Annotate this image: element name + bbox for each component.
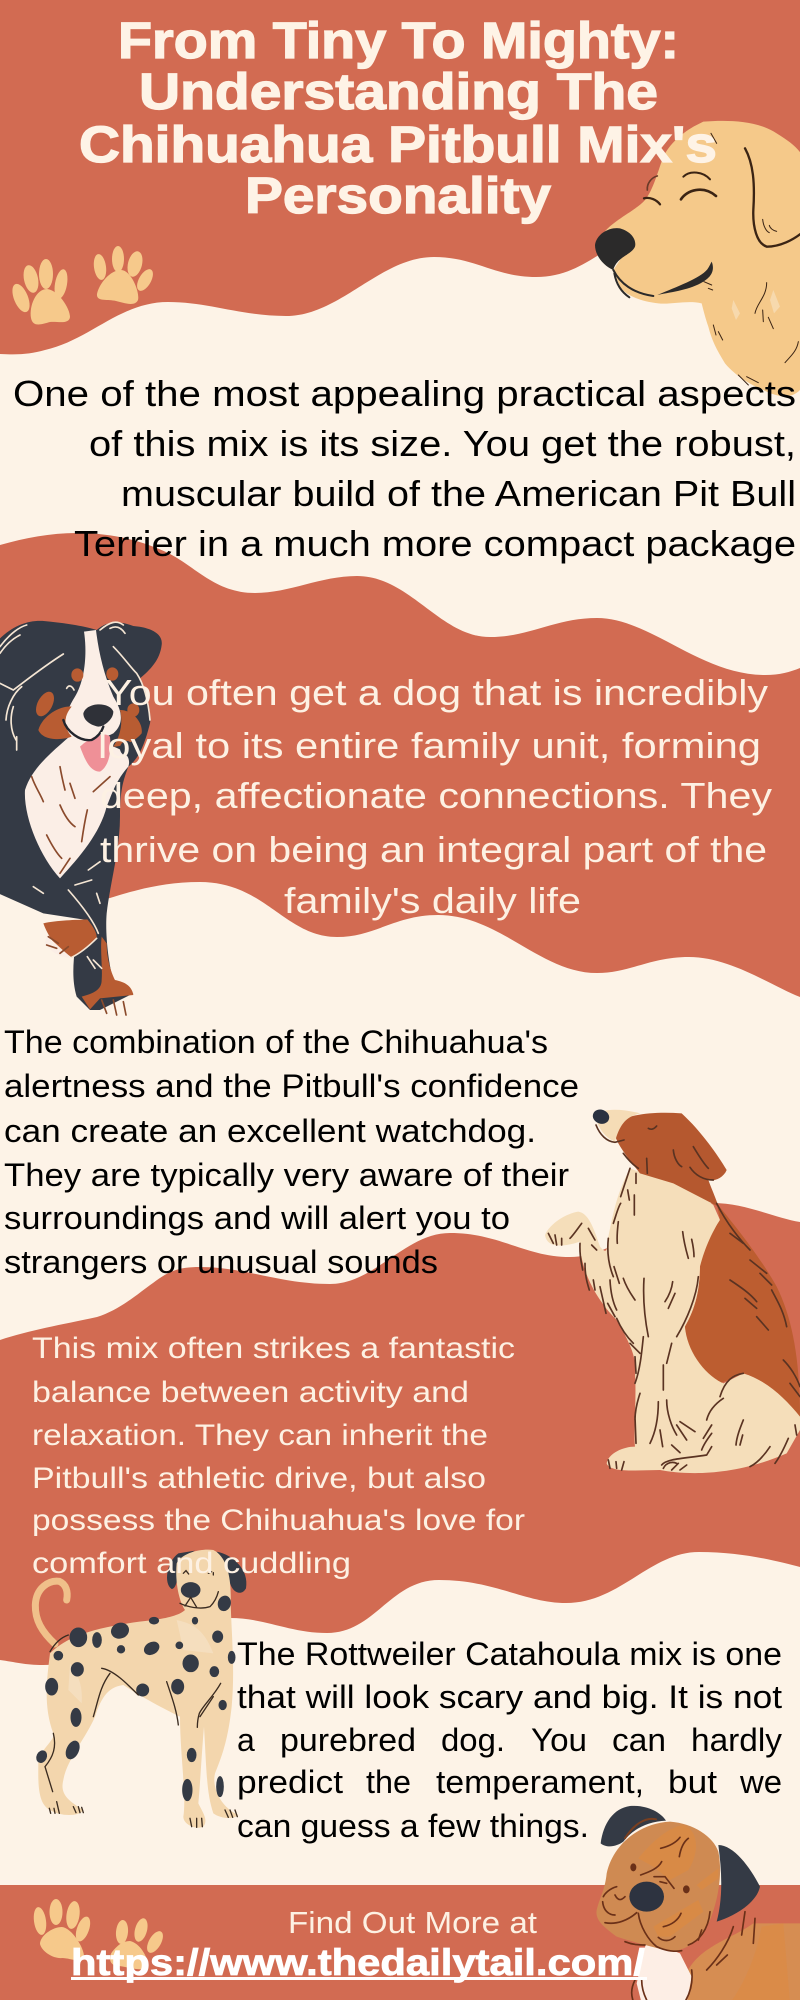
text block: rottweiler catahoula: but [668, 1764, 717, 1800]
paw prints top [9, 246, 156, 324]
icon: golden retriever head [595, 121, 800, 396]
paw bottom right [110, 1917, 166, 1969]
text block: loyalty [98, 672, 772, 921]
text block: rottweiler catahoula: can [612, 1722, 666, 1758]
text block: size: muscular build of the American Pit Bull [121, 473, 796, 514]
text block: rottweiler catahoula: the [366, 1764, 411, 1800]
title: From Tiny To Mighty: [118, 12, 679, 69]
text block: size: One of the most appealing practical aspects [13, 373, 796, 414]
text block: rottweiler catahoula [237, 1636, 782, 1844]
text block: balance [32, 1332, 525, 1580]
text block: loyalty: thrive on being an integral part of the [100, 829, 767, 870]
title: Understanding The [139, 63, 658, 120]
text block: balance: This mix often strikes a fantastic [32, 1332, 515, 1365]
paw bottom left [32, 1899, 93, 1960]
text block: watchdog: alertness and the Pitbull's confidence [4, 1068, 579, 1104]
text block: watchdog: They are typically very aware of their [4, 1157, 569, 1193]
top wave band [0, 0, 800, 354]
text block: rottweiler catahoula: hardly [691, 1722, 782, 1758]
paw right [92, 246, 156, 304]
text block: loyalty: deep, affectionate connections. They [100, 775, 772, 816]
text block: rottweiler catahoula: that will look scary and big. It is not [237, 1679, 782, 1715]
website link: https://www.thedailytail.com/ [71, 1942, 645, 1983]
text block: balance: relaxation. They can inherit the [32, 1419, 488, 1452]
text block: balance: balance between activity and [32, 1376, 469, 1409]
third wave band [0, 1203, 800, 1665]
text block: size: of this mix is its size. You get the robust, [89, 423, 796, 464]
text block: rottweiler catahoula: predict [237, 1764, 343, 1800]
icon: collie dog with raised paw [545, 1107, 800, 1473]
icon: dalmatian dog [35, 1550, 246, 1828]
icon: bernese mountain dog [0, 621, 162, 1015]
text block: size [13, 373, 796, 564]
text block: watchdog: surroundings and will alert you to [4, 1200, 510, 1236]
footer call to action [71, 1905, 647, 1983]
find out more label: Find Out More at [288, 1905, 537, 1940]
text block: rottweiler catahoula: temperament, [436, 1764, 644, 1800]
brown leg markings [82, 937, 133, 1009]
text block: rottweiler catahoula: You [531, 1722, 587, 1758]
text block: rottweiler catahoula: dog. [441, 1722, 505, 1758]
paw left [9, 259, 70, 324]
text block: size: Terrier in a much more compact package [74, 523, 796, 564]
paw prints bottom [32, 1899, 166, 1969]
icon: bulldog mastiff [596, 1806, 800, 2000]
text block: rottweiler catahoula: purebred [280, 1722, 416, 1758]
text block: watchdog [4, 1024, 579, 1280]
text block: rottweiler catahoula: can guess a few things. [237, 1808, 589, 1844]
text block: loyalty: loyal to its entire family unit, forming [98, 725, 761, 766]
text block: watchdog: can create an excellent watchdog. [4, 1113, 536, 1149]
text block: watchdog: The combination of the Chihuahua's [4, 1024, 548, 1060]
text block: loyalty: You often get a dog that is incredibly [105, 672, 768, 713]
text block: rottweiler catahoula: a [237, 1722, 255, 1758]
text block: balance: possess the Chihuahua's love for [32, 1504, 525, 1537]
text block: balance: comfort and cuddling [32, 1547, 351, 1580]
text block: loyalty: family's daily life [284, 880, 581, 921]
footer band [0, 1885, 800, 2000]
text block: watchdog: strangers or unusual sounds [4, 1244, 438, 1280]
title: Chihuahua Pitbull Mix's [79, 116, 717, 173]
text block: rottweiler catahoula: we [739, 1764, 782, 1800]
title: Personality [245, 167, 552, 224]
title [79, 12, 717, 224]
text block: balance: Pitbull's athletic drive, but also [32, 1462, 486, 1495]
second wave band [0, 533, 800, 997]
text block: rottweiler catahoula: The Rottweiler Catahoula mix is one [237, 1636, 782, 1672]
